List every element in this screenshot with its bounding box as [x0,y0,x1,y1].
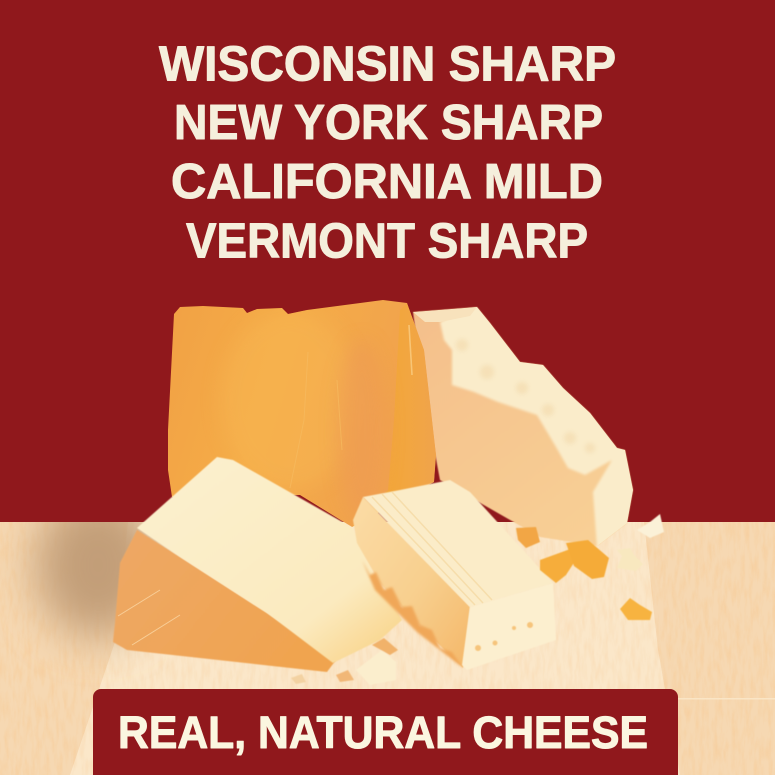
cheese: front rectangular block [353,480,556,670]
heading line: California Mild: CALIFORNIA MILD [171,155,603,209]
cheese: large front wedge [113,457,402,672]
heading line: Vermont Sharp: VERMONT SHARP [186,214,588,268]
heading: cheese varieties [159,38,616,268]
wooden cutting board [0,522,775,775]
cheese illustration [113,295,664,685]
cheese: white crumbly back wedge [413,305,640,548]
banner: real natural cheese [93,689,678,775]
heading line: Wisconsin Sharp: WISCONSIN SHARP [159,38,616,92]
cheese crumbs [291,514,664,685]
heading line: New York Sharp: NEW YORK SHARP [174,96,603,150]
banner text: REAL, NATURAL CHEESE [118,707,648,758]
cheese: orange cheddar block [168,300,436,527]
